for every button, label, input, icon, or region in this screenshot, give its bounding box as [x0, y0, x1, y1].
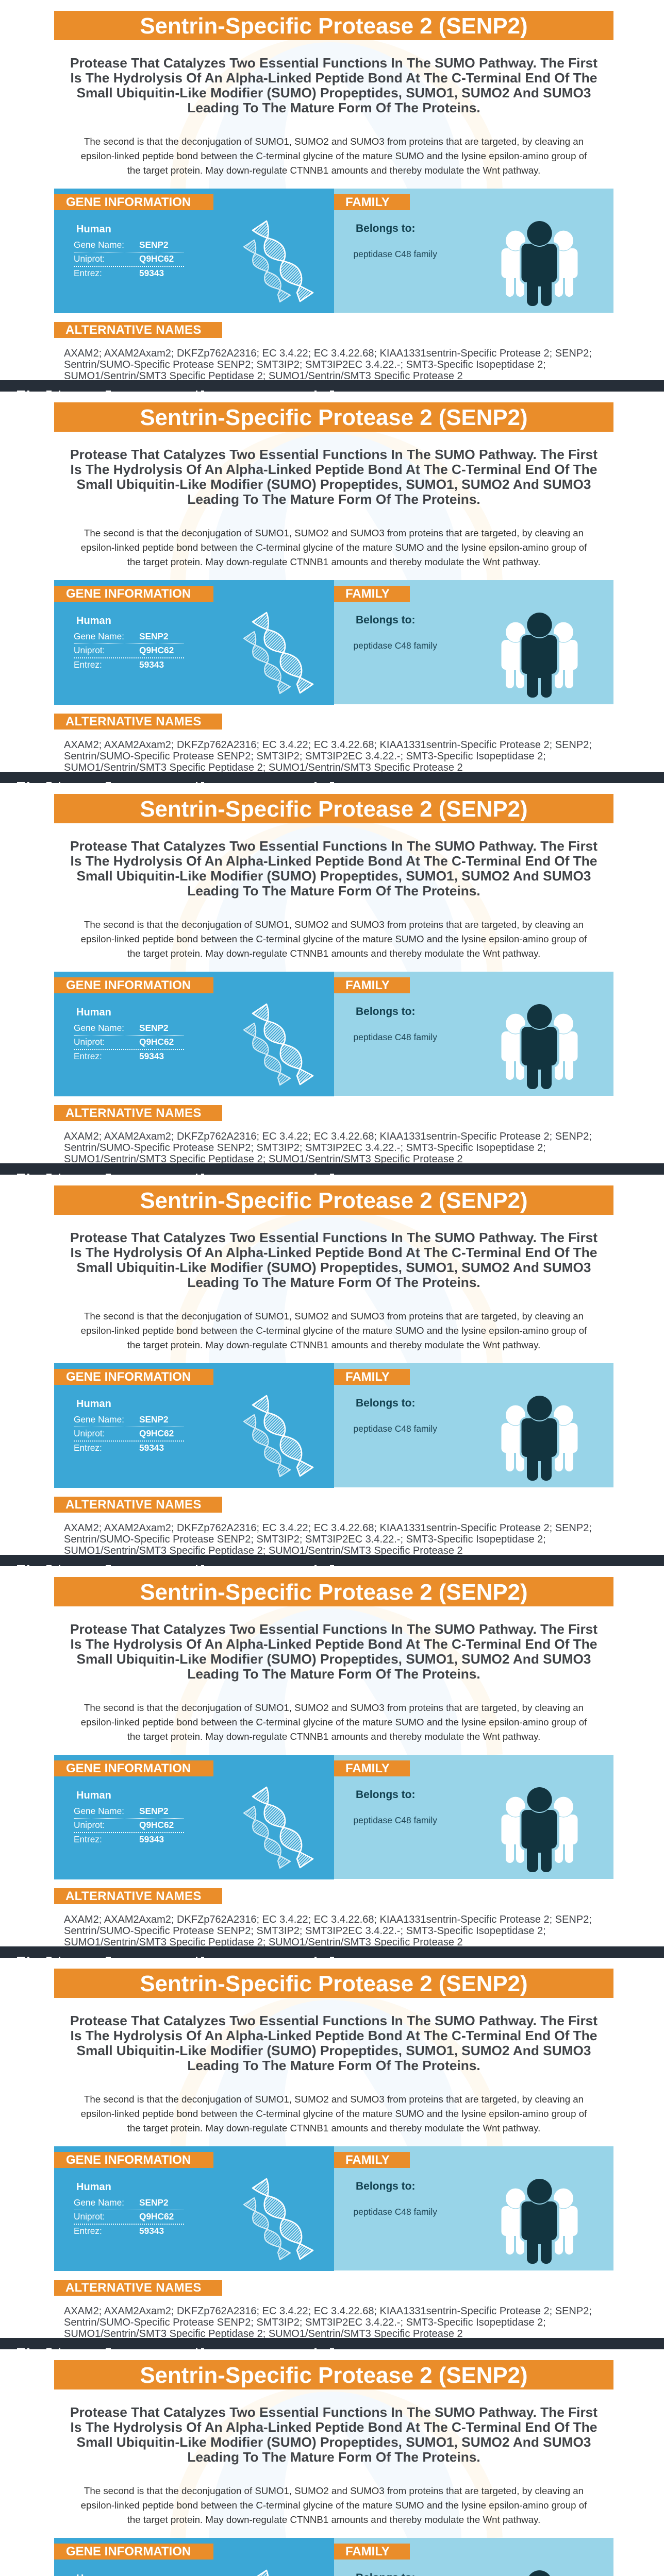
text block: description: the target protein. May down-regulate CTNNB1 amounts and thereby modulate the Wnt pathway. [127, 556, 540, 567]
heading: alternative names: ALTERNATIVE NAMES [65, 323, 202, 337]
row: entrez: 59343 [139, 659, 164, 670]
icon: dna [237, 2566, 320, 2576]
watermark [170, 1215, 503, 1363]
panel: block 7 [0, 2349, 664, 2576]
label: belongs to: Belongs to: [356, 223, 416, 234]
panel: family [334, 2146, 613, 2270]
row: uniprot: Uniprot: [74, 1428, 105, 1438]
label: belongs to: Belongs to: [356, 614, 416, 626]
row: entrez: Entrez: [74, 268, 102, 278]
heading: Small Ubiquitin-Like Modifier (SUMO) Propeptides, SUMO1, SUMO2 And SUMO3 [76, 2434, 591, 2450]
text block: alternative names [64, 2306, 616, 2338]
text block: description: the target protein. May down-regulate CTNNB1 amounts and thereby modulate the Wnt pathway. [127, 1731, 540, 1741]
heading: gene information: GENE INFORMATION [66, 1370, 191, 1384]
row: entrez: 59343 [139, 2226, 164, 2236]
watermark [170, 432, 503, 580]
heading: Is The Hydrolysis Of An Alpha-Linked Peptide Bond At The C-Terminal End Of The [71, 2028, 597, 2043]
heading: family [334, 977, 410, 993]
row: gene name [74, 631, 184, 644]
panel: family [334, 972, 613, 1096]
heading: gene information: GENE INFORMATION [66, 2545, 191, 2558]
text block: alternative names: AXAM2; AXAM2Axam2; DKFZp762A2316; EC 3.4.22; EC 3.4.22.68; KIAA1331sentrin-Specific Protease 2; SENP2; [64, 1131, 592, 1142]
icon: people [495, 2566, 583, 2576]
heading: Protease That Catalyzes Two Essential Functions In The SUMO Pathway. The First [70, 838, 597, 854]
icon: people [501, 613, 577, 698]
watermark [155, 1994, 516, 2146]
heading [70, 447, 597, 507]
heading [70, 55, 597, 115]
text block: description: The second is that the deconjugation of SUMO1, SUMO2 and SUMO3 from proteins that are targeted, by cleaving an [84, 1311, 584, 1321]
label: belongs to: Belongs to: [356, 2180, 416, 2192]
heading: gene information [54, 2152, 213, 2168]
icon: dna [237, 2174, 320, 2267]
heading: Protease That Catalyzes Two Essential Functions In The SUMO Pathway. The First [70, 1621, 597, 1637]
panel: gene information [54, 580, 334, 705]
text block: alternative names: AXAM2; AXAM2Axam2; DKFZp762A2316; EC 3.4.22; EC 3.4.22.68; KIAA1331sentrin-Specific Protease 2; SENP2; [64, 1522, 592, 1534]
icon: dna [237, 1783, 320, 1875]
title: Sentrin-Specific Protease 2 (SENP2) [140, 1971, 528, 1996]
panel: block 5 [0, 1577, 664, 1958]
row: entrez: Entrez: [74, 1443, 102, 1453]
row: uniprot: Uniprot: [74, 1037, 105, 1047]
label: belongs to: Belongs to: [356, 1789, 416, 1801]
text block: description: The second is that the deconjugation of SUMO1, SUMO2 and SUMO3 from proteins that are targeted, by cleaving an [84, 528, 584, 538]
text block: description: epsilon-linked peptide bond between the C-terminal glycine of the mature SUMO and the lysine epsilon-amino group of [81, 542, 587, 552]
heading: gene information [54, 194, 213, 210]
panel: block 6 [0, 1958, 664, 2349]
row: gene name: Gene Name: [74, 1806, 124, 1816]
watermark [170, 823, 503, 972]
text: family value: peptidase C48 family [354, 640, 437, 651]
panel: gene information [54, 189, 334, 313]
panel: gene information [54, 2146, 334, 2271]
text: family value: peptidase C48 family [354, 1032, 437, 1042]
panel: gene information [54, 1363, 334, 1488]
watermark [170, 1606, 503, 1755]
heading: Small Ubiquitin-Like Modifier (SUMO) Propeptides, SUMO1, SUMO2 And SUMO3 [76, 477, 591, 492]
heading: alternative names: ALTERNATIVE NAMES [65, 2281, 202, 2295]
heading: alternative names: ALTERNATIVE NAMES [65, 1106, 202, 1120]
icon: dna [243, 1004, 313, 1086]
icon: people [495, 2174, 583, 2267]
heading: Small Ubiquitin-Like Modifier (SUMO) Propeptides, SUMO1, SUMO2 And SUMO3 [76, 1651, 591, 1667]
row: gene name: SENP2 [139, 631, 169, 641]
icon: people [501, 1004, 577, 1089]
row: entrez: Entrez: [74, 659, 102, 670]
heading: family [334, 1760, 410, 1776]
row: uniprot: Q9HC62 [139, 2211, 174, 2222]
panel: family [334, 1363, 613, 1487]
text block: description: The second is that the deconjugation of SUMO1, SUMO2 and SUMO3 from proteins that are targeted, by cleaving an [84, 919, 584, 929]
row: gene name [74, 1023, 184, 1036]
icon: people [501, 1396, 577, 1481]
text: family value: peptidase C48 family [354, 2207, 437, 2217]
text block: description: epsilon-linked peptide bond between the C-terminal glycine of the mature SUMO and the lysine epsilon-amino group of [81, 2500, 587, 2510]
heading [70, 1621, 597, 1682]
row: uniprot [74, 2211, 184, 2225]
row: gene name [74, 240, 184, 252]
row: uniprot: Uniprot: [74, 253, 105, 264]
row: entrez [74, 2226, 184, 2238]
title [54, 2360, 613, 2389]
heading: Is The Hydrolysis Of An Alpha-Linked Peptide Bond At The C-Terminal End Of The [71, 1245, 597, 1260]
label: human: Human [76, 1398, 111, 1410]
text: family value: peptidase C48 family [354, 249, 437, 259]
title: Sentrin-Specific Protease 2 (SENP2) [140, 405, 528, 430]
text block: alternative names: Sentrin/SUMO-Specific Protease SENP2; SMT3IP2; SMT3IP2EC 3.4.22.-; SMT3-Specific Isopeptidase 2; [64, 1925, 546, 1937]
title [54, 1577, 613, 1606]
text block: alternative names: AXAM2; AXAM2Axam2; DKFZp762A2316; EC 3.4.22; EC 3.4.22.68; KIAA1331sentrin-Specific Protease 2; SENP2; [64, 2306, 592, 2317]
heading: alternative names: ALTERNATIVE NAMES [65, 1889, 202, 1903]
heading: Is The Hydrolysis Of An Alpha-Linked Peptide Bond At The C-Terminal End Of The [71, 1636, 597, 1652]
heading: family [334, 2544, 410, 2560]
heading [70, 1230, 597, 1290]
heading: gene information [54, 977, 213, 993]
text block: description: the target protein. May down-regulate CTNNB1 amounts and thereby modulate the Wnt pathway. [127, 165, 540, 175]
heading: family [334, 586, 410, 602]
heading: gene information: GENE INFORMATION [66, 587, 191, 601]
panel: block 1 [0, 11, 664, 392]
heading: Protease That Catalyzes Two Essential Functions In The SUMO Pathway. The First [70, 2404, 597, 2420]
row: uniprot [74, 1037, 184, 1050]
heading: Protease That Catalyzes Two Essential Functions In The SUMO Pathway. The First [70, 55, 597, 71]
title: Sentrin-Specific Protease 2 (SENP2) [140, 1580, 528, 1605]
text block: alternative names: Sentrin/SUMO-Specific Protease SENP2; SMT3IP2; SMT3IP2EC 3.4.22.-; SMT3-Specific Isopeptidase 2; [64, 751, 546, 762]
text block: description: the target protein. May down-regulate CTNNB1 amounts and thereby modulate the Wnt pathway. [127, 948, 540, 958]
text block: description [81, 919, 587, 959]
heading: family [334, 1369, 410, 1385]
row: gene name [74, 1414, 184, 1427]
heading: Leading To The Mature Form Of The Proteins. [187, 100, 480, 115]
heading: gene information: GENE INFORMATION [66, 1761, 191, 1775]
heading: gene information [54, 1369, 213, 1385]
row: uniprot: Q9HC62 [139, 1820, 174, 1830]
text block: description [81, 1702, 587, 1742]
heading: family: FAMILY [345, 195, 390, 209]
heading: family [334, 194, 410, 210]
heading [70, 838, 597, 899]
text block: description [81, 528, 587, 567]
text block: description: The second is that the deconjugation of SUMO1, SUMO2 and SUMO3 from proteins that are targeted, by cleaving an [84, 2094, 584, 2104]
row: uniprot: Q9HC62 [139, 645, 174, 655]
heading: Small Ubiquitin-Like Modifier (SUMO) Propeptides, SUMO1, SUMO2 And SUMO3 [76, 2043, 591, 2058]
row: gene name: Gene Name: [74, 2197, 124, 2208]
heading: family: FAMILY [345, 587, 390, 601]
row: uniprot: Q9HC62 [139, 1037, 174, 1047]
label: belongs to: Belongs to: [356, 1006, 416, 1018]
text block: alternative names [64, 1914, 616, 1946]
text block: description: epsilon-linked peptide bond between the C-terminal glycine of the mature SUMO and the lysine epsilon-amino group of [81, 934, 587, 944]
panel: gene information [54, 972, 334, 1096]
heading: Is The Hydrolysis Of An Alpha-Linked Peptide Bond At The C-Terminal End Of The [71, 853, 597, 869]
heading: Leading To The Mature Form Of The Proteins. [187, 1666, 480, 1682]
row: uniprot: Q9HC62 [139, 253, 174, 264]
heading: Leading To The Mature Form Of The Proteins. [187, 883, 480, 899]
row: entrez: 59343 [139, 1051, 164, 1061]
label: human: Human [76, 1007, 111, 1018]
title [54, 402, 613, 432]
panel: family [334, 1755, 613, 1879]
icon: dna [243, 221, 313, 303]
heading: family: FAMILY [345, 2153, 390, 2167]
text block: description: the target protein. May down-regulate CTNNB1 amounts and thereby modulate the Wnt pathway. [127, 1340, 540, 1350]
row: entrez [74, 1834, 184, 1846]
label: human: Human [76, 1790, 111, 1801]
row: uniprot [74, 253, 184, 267]
panel: block 3 [0, 794, 664, 1175]
heading: family: FAMILY [345, 2545, 390, 2558]
row: entrez: Entrez: [74, 1834, 102, 1844]
panel: gene information [54, 1755, 334, 1879]
text block: description: epsilon-linked peptide bond between the C-terminal glycine of the mature SUMO and the lysine epsilon-amino group of [81, 150, 587, 161]
row: gene name: SENP2 [139, 1806, 169, 1816]
heading [54, 2013, 613, 2073]
heading: family: FAMILY [345, 1370, 390, 1384]
heading: gene information [54, 2544, 213, 2560]
heading: Leading To The Mature Form Of The Proteins. [187, 2449, 480, 2465]
text block: alternative names [64, 348, 592, 380]
row: gene name: SENP2 [139, 2197, 169, 2208]
heading: Small Ubiquitin-Like Modifier (SUMO) Propeptides, SUMO1, SUMO2 And SUMO3 [76, 868, 591, 884]
text: family value: peptidase C48 family [354, 1423, 437, 1434]
panel: gene information [54, 2538, 334, 2576]
row: entrez: 59343 [139, 268, 164, 278]
title [54, 1969, 613, 1998]
row: gene name [74, 1806, 184, 1819]
heading: gene information: GENE INFORMATION [66, 195, 191, 209]
heading: gene information: GENE INFORMATION [66, 2153, 191, 2167]
text block: description: The second is that the deconjugation of SUMO1, SUMO2 and SUMO3 from proteins that are targeted, by cleaving an [84, 136, 584, 146]
icon: people [501, 221, 577, 306]
text block: description: the target protein. May down-regulate CTNNB1 amounts and thereby modulate the Wnt pathway. [127, 2514, 540, 2524]
heading: Is The Hydrolysis Of An Alpha-Linked Peptide Bond At The C-Terminal End Of The [71, 462, 597, 477]
text block: description: the target protein. May down-regulate CTNNB1 amounts and thereby modulate the Wnt pathway. [127, 2123, 540, 2133]
title [54, 11, 613, 40]
heading: family: FAMILY [345, 1761, 390, 1775]
text block: description: The second is that the deconjugation of SUMO1, SUMO2 and SUMO3 from proteins that are targeted, by cleaving an [84, 2485, 584, 2496]
icon: dna [243, 1395, 313, 1478]
row: gene name: SENP2 [139, 1414, 169, 1425]
label: human: Human [76, 615, 111, 626]
row: uniprot: Uniprot: [74, 2211, 105, 2222]
text block: description [81, 1311, 587, 1350]
row: entrez [74, 659, 164, 670]
title: Sentrin-Specific Protease 2 (SENP2) [140, 2363, 528, 2388]
row: entrez [74, 1051, 164, 1061]
text block: description: epsilon-linked peptide bond between the C-terminal glycine of the mature SUMO and the lysine epsilon-amino group of [81, 2108, 587, 2119]
text block: description [81, 136, 587, 176]
heading: Is The Hydrolysis Of An Alpha-Linked Peptide Bond At The C-Terminal End Of The [71, 2419, 597, 2435]
row: entrez [74, 268, 164, 278]
text block: alternative names: Sentrin/SUMO-Specific Protease SENP2; SMT3IP2; SMT3IP2EC 3.4.22.-; SMT3-Specific Isopeptidase 2; [64, 2317, 546, 2328]
row: gene name: SENP2 [139, 240, 169, 250]
title [54, 794, 613, 823]
icon: dna [243, 612, 313, 694]
text: family value: peptidase C48 family [354, 1815, 437, 1825]
row: entrez: Entrez: [74, 1051, 102, 1061]
label: human: Human [76, 224, 111, 235]
heading: Is The Hydrolysis Of An Alpha-Linked Peptide Bond At The C-Terminal End Of The [71, 70, 597, 86]
panel: family [334, 580, 613, 704]
heading: Small Ubiquitin-Like Modifier (SUMO) Propeptides, SUMO1, SUMO2 And SUMO3 [76, 1260, 591, 1275]
heading: alternative names: ALTERNATIVE NAMES [65, 1498, 202, 1512]
heading: Protease That Catalyzes Two Essential Functions In The SUMO Pathway. The First [70, 1230, 597, 1245]
label: belongs to: Belongs to: [356, 1397, 416, 1409]
row: uniprot: Uniprot: [74, 1820, 105, 1830]
text block: alternative names: AXAM2; AXAM2Axam2; DKFZp762A2316; EC 3.4.22; EC 3.4.22.68; KIAA1331sentrin-Specific Protease 2; SENP2; [64, 739, 592, 751]
row: gene name: Gene Name: [74, 240, 124, 250]
text block: alternative names [64, 1522, 592, 1555]
row: uniprot: Uniprot: [74, 645, 105, 655]
icon: people [495, 1783, 583, 1875]
row: entrez: 59343 [139, 1834, 164, 1844]
row: uniprot [74, 1428, 184, 1442]
panel: block 2 [0, 402, 664, 783]
heading: gene information [54, 1760, 213, 1776]
heading: Protease That Catalyzes Two Essential Functions In The SUMO Pathway. The First [70, 2013, 597, 2028]
heading: family: FAMILY [345, 978, 390, 992]
text block: alternative names: AXAM2; AXAM2Axam2; DKFZp762A2316; EC 3.4.22; EC 3.4.22.68; KIAA1331sentrin-Specific Protease 2; SENP2; [64, 1914, 592, 1925]
text block: alternative names: Sentrin/SUMO-Specific Protease SENP2; SMT3IP2; SMT3IP2EC 3.4.22.-; SMT3-Specific Isopeptidase 2; [64, 1142, 546, 1154]
title: Sentrin-Specific Protease 2 (SENP2) [140, 13, 528, 39]
text block: alternative names: AXAM2; AXAM2Axam2; DKFZp762A2316; EC 3.4.22; EC 3.4.22.68; KIAA1331sentrin-Specific Protease 2; SENP2; [64, 348, 592, 359]
text block: alternative names: Sentrin/SUMO-Specific Protease SENP2; SMT3IP2; SMT3IP2EC 3.4.22.-; SMT3-Specific Isopeptidase 2; [64, 1534, 546, 1545]
row: uniprot: Q9HC62 [139, 1428, 174, 1438]
row: gene name: Gene Name: [74, 631, 124, 641]
text block: description: epsilon-linked peptide bond between the C-terminal glycine of the mature SUMO and the lysine epsilon-amino group of [81, 1325, 587, 1335]
panel: block 4 [0, 1185, 664, 1566]
row: gene name: Gene Name: [74, 1023, 124, 1033]
text block: description [54, 2483, 613, 2527]
row: gene name: Gene Name: [74, 1414, 124, 1425]
text block: alternative names: Sentrin/SUMO-Specific Protease SENP2; SMT3IP2; SMT3IP2EC 3.4.22.-; SMT3-Specific Isopeptidase 2; [64, 359, 546, 370]
panel: family [334, 189, 613, 313]
row: gene name: SENP2 [139, 1023, 169, 1033]
text block: description: epsilon-linked peptide bond between the C-terminal glycine of the mature SUMO and the lysine epsilon-amino group of [81, 1717, 587, 1727]
text block: description: The second is that the deconjugation of SUMO1, SUMO2 and SUMO3 from proteins that are targeted, by cleaving an [84, 1702, 584, 1713]
row: gene name [74, 2197, 184, 2210]
row: uniprot [74, 1820, 184, 1833]
title: Sentrin-Specific Protease 2 (SENP2) [140, 796, 528, 822]
title [54, 1185, 613, 1215]
watermark [155, 2385, 516, 2538]
heading: family [334, 2152, 410, 2168]
watermark [170, 40, 503, 189]
heading: Leading To The Mature Form Of The Proteins. [187, 492, 480, 507]
row: entrez: Entrez: [74, 2226, 102, 2236]
panel: family [334, 2538, 613, 2576]
text block: alternative names [64, 1131, 592, 1163]
text block: description [54, 2092, 613, 2135]
heading: Protease That Catalyzes Two Essential Functions In The SUMO Pathway. The First [70, 447, 597, 462]
row: uniprot [74, 645, 184, 658]
row: entrez [74, 1443, 164, 1453]
heading: Leading To The Mature Form Of The Proteins. [187, 1275, 480, 1290]
row: entrez: 59343 [139, 1443, 164, 1453]
label: human: Human [76, 2181, 111, 2193]
heading: Leading To The Mature Form Of The Proteins. [187, 2058, 480, 2073]
heading: gene information: GENE INFORMATION [66, 978, 191, 992]
title: Sentrin-Specific Protease 2 (SENP2) [140, 1188, 528, 1213]
text block: alternative names [64, 739, 592, 772]
heading [54, 2405, 613, 2465]
heading: Small Ubiquitin-Like Modifier (SUMO) Propeptides, SUMO1, SUMO2 And SUMO3 [76, 85, 591, 100]
heading: gene information [54, 586, 213, 602]
heading: alternative names: ALTERNATIVE NAMES [65, 715, 202, 728]
